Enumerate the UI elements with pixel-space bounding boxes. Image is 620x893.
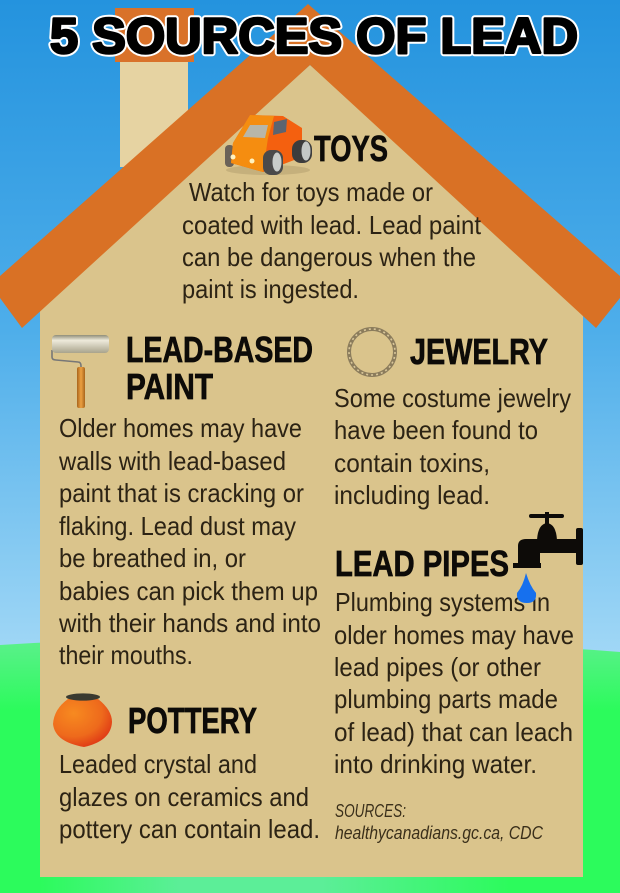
text: jewelry body: including lead. <box>334 480 490 510</box>
heading: toys: TOYS <box>314 128 388 169</box>
icon: toy car <box>225 115 312 175</box>
text: paint body: Older homes may have <box>59 413 302 443</box>
text: toys body: coated with lead. Lead paint <box>182 210 482 240</box>
text: lead pipes body: older homes may have <box>334 620 574 650</box>
title: 5 SOURCES OF LEAD <box>50 8 578 64</box>
text: sources <box>335 801 544 843</box>
text: jewelry body: Some costume jewelry <box>334 383 571 413</box>
text: jewelry body <box>334 383 571 510</box>
background: sky <box>0 0 620 660</box>
chimney <box>115 8 194 167</box>
icon: water drop <box>517 573 536 603</box>
text: lead pipes body <box>334 587 574 779</box>
title: 5 SOURCES OF LEAD <box>50 8 578 64</box>
icon: paint roller <box>52 335 109 408</box>
heading: lead-based paint <box>126 329 313 407</box>
background: pale bottom strip <box>40 877 510 893</box>
text: pottery body <box>59 749 320 844</box>
text: lead pipes body: Plumbing systems in <box>335 587 550 617</box>
text: paint body: flaking. Lead dust may <box>59 511 296 541</box>
background: green hills <box>0 640 620 893</box>
heading: lead-based paint: PAINT <box>126 366 213 407</box>
icon: chain necklace <box>349 329 395 375</box>
house body <box>40 65 583 877</box>
panel: jewelry <box>334 329 571 510</box>
roof <box>0 4 620 328</box>
text: jewelry body: have been found to <box>334 415 538 445</box>
text: paint body: babies can pick them up <box>59 576 318 606</box>
heading: pottery: POTTERY <box>128 700 257 741</box>
text: paint body: paint that is cracking or <box>59 478 304 508</box>
text: lead pipes body: plumbing parts made <box>334 684 558 714</box>
text: sources: SOURCES: <box>335 801 406 821</box>
heading: jewelry: JEWELRY <box>410 331 548 372</box>
text: toys body: Watch for toys made or <box>189 177 433 207</box>
text: paint body: be breathed in, or <box>59 543 246 573</box>
text: toys body <box>182 177 482 304</box>
text: jewelry body: contain toxins, <box>334 448 490 478</box>
text: toys body: can be dangerous when the <box>182 242 476 272</box>
text: pottery body: glazes on ceramics and <box>59 782 309 812</box>
text: paint body: with their hands and into <box>58 608 321 638</box>
text: pottery body: Leaded crystal and <box>59 749 257 779</box>
panel: pottery <box>53 693 320 844</box>
heading: lead-based paint: LEAD-BASED <box>126 329 313 370</box>
text: lead pipes body: lead pipes (or other <box>334 652 541 682</box>
text: lead pipes body: of lead) that can leach <box>334 717 573 747</box>
panel: lead-based paint <box>52 329 321 670</box>
text: lead pipes body: into drinking water. <box>334 749 537 779</box>
panel: lead pipes <box>334 512 583 779</box>
text: paint body <box>58 413 321 670</box>
text: paint body: walls with lead-based <box>58 446 286 476</box>
panel: toys <box>182 115 482 304</box>
icon: faucet <box>513 512 583 568</box>
text: pottery body: pottery can contain lead. <box>59 814 320 844</box>
text: toys body: paint is ingested. <box>182 274 359 304</box>
text: sources: healthycanadians.gc.ca, CDC <box>335 823 544 843</box>
text: paint body: their mouths. <box>59 640 193 670</box>
heading: lead pipes: LEAD PIPES <box>335 543 509 584</box>
icon: clay pot <box>53 693 112 747</box>
